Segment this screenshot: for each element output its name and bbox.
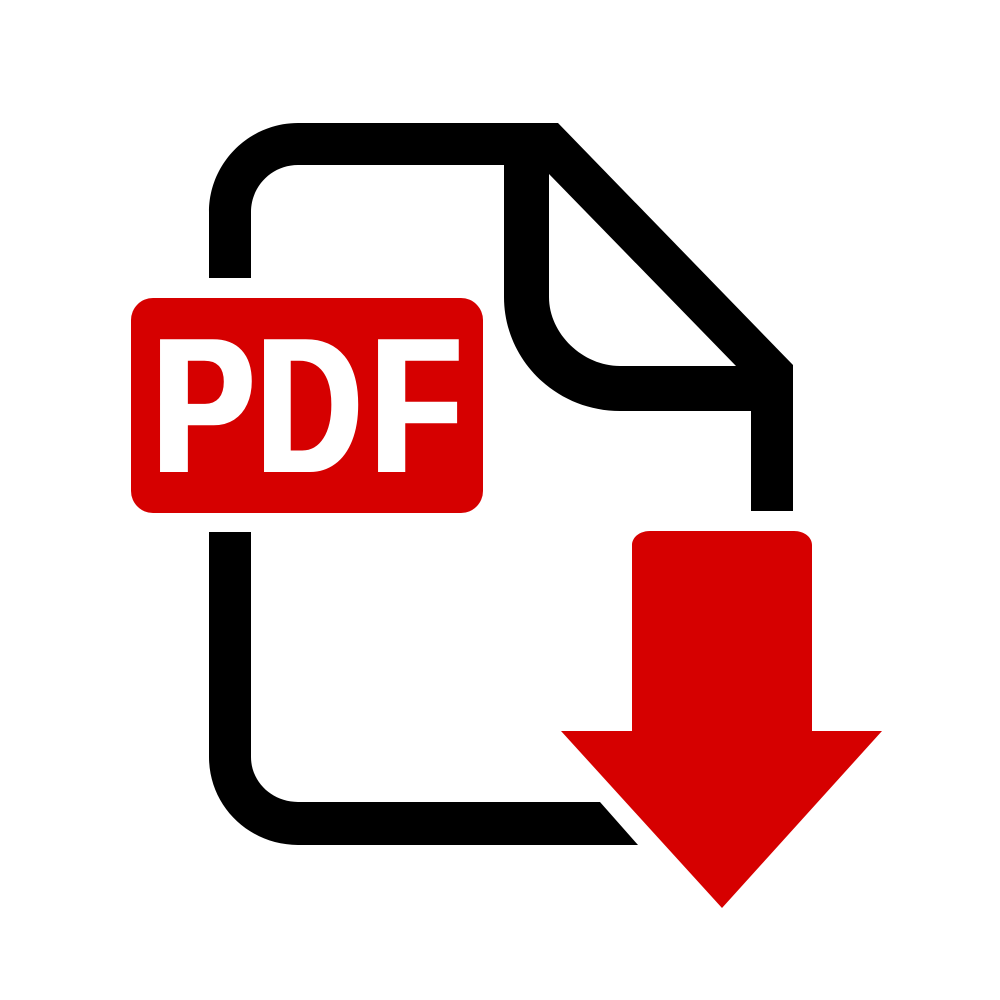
badge background: [131, 298, 483, 513]
icon: document outline lower part: [209, 532, 638, 845]
badge label: PDF: D: [257, 298, 361, 514]
badge label: PDF: F: [371, 299, 461, 514]
badge label: PDF: [153, 297, 461, 514]
icon: document outline upper part with folded corner: [209, 123, 793, 511]
PDF badge: [131, 297, 483, 514]
badge label: PDF: P: [153, 297, 254, 513]
icon: red download arrow: [561, 531, 882, 908]
